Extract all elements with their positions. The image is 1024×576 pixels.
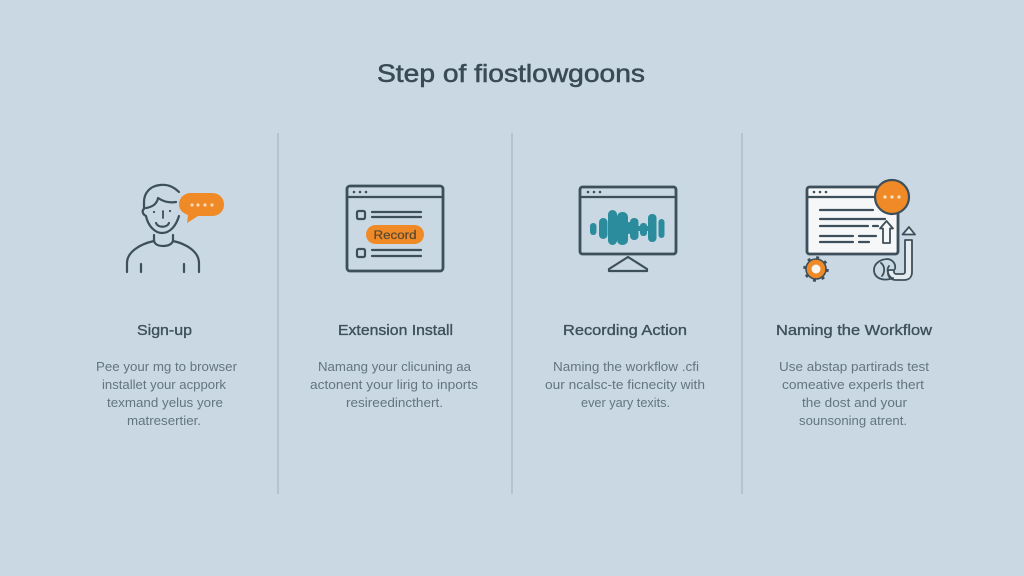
icon: monitor with waveform [580, 187, 676, 271]
text block: naming the workflow description: comeative experls thert [782, 377, 924, 392]
text block: recording action description: Naming the workflow .cfi [553, 359, 699, 374]
waveform [590, 210, 664, 245]
text block: naming the workflow description: the dost and your [802, 395, 908, 410]
text block: sign-up description: matresertier. [127, 413, 201, 428]
panel: extension install [310, 186, 479, 410]
panel: sign-up [96, 185, 238, 428]
icon: pipe with arrow [874, 227, 915, 280]
panel: recording action [545, 187, 705, 410]
text block: sign-up description: Pee your mg to browser [96, 359, 238, 374]
heading: sign-up: Sign-up [137, 322, 192, 339]
heading: extension install: Extension Install [338, 322, 453, 339]
panel: naming the workflow [776, 180, 932, 428]
badge: orange circle [875, 180, 909, 214]
heading: naming the workflow: Naming the Workflow [776, 322, 932, 339]
icon: document window with badge, gear and arrows [804, 180, 915, 280]
icon: orange speech bubble [179, 193, 224, 223]
text block: recording action description: our ncalsc-te ficnecity with [545, 377, 705, 392]
text block: sign-up description: installet your acppork [102, 377, 227, 392]
icon: person with speech bubble [127, 185, 224, 272]
text block: naming the workflow description [779, 359, 929, 428]
icon: up arrow [880, 221, 893, 243]
text block: recording action description: ever yary texits. [581, 395, 670, 410]
text block: sign-up description: texmand yelus yore [107, 395, 223, 410]
text block: recording action description [545, 359, 705, 410]
text block: extension install description [310, 359, 479, 410]
text block: naming the workflow description: Use abstap partirads test [779, 359, 929, 374]
title: Step of fiostlowgoons [377, 60, 645, 88]
icon: gear [804, 258, 828, 280]
text block: sign-up description [96, 359, 238, 428]
text block: naming the workflow description: sounsoning atrent. [799, 413, 907, 428]
text block: extension install description: Namang your clicuning aa [318, 359, 472, 374]
button: record: Record [374, 230, 416, 242]
text block: extension install description: resireedincthert. [346, 395, 443, 410]
text block: extension install description: actonent your lirig to inports [310, 377, 479, 392]
heading: recording action: Recording Action [563, 322, 687, 339]
icon: browser window with record button [347, 186, 443, 271]
